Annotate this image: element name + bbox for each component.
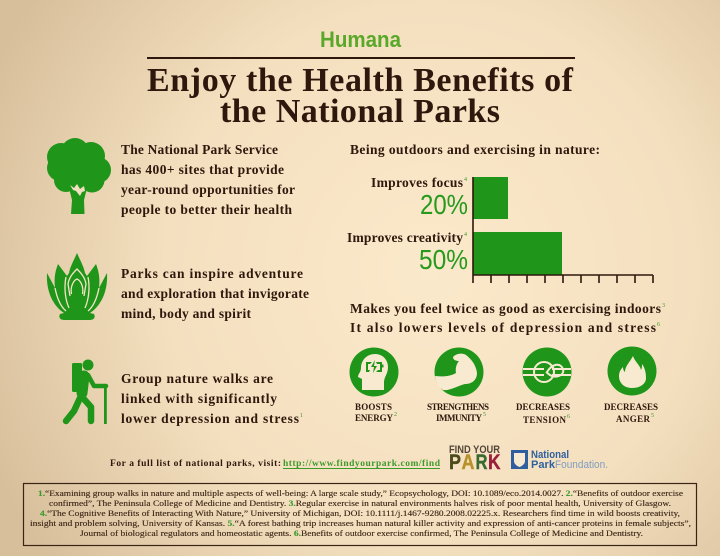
label: improves creativity: 4	[464, 232, 467, 238]
title: Enjoy the Health Benefits of	[147, 62, 574, 99]
panel: references: confirmed”, The Peninsula College of Medicine and Dentistry. 3.Regular exercise in natural environments halves risk of poor mental health, University of Glasgow.	[49, 499, 671, 508]
label: boosts energy: ENERGY	[355, 413, 394, 423]
label: decreases tension: TENSION	[523, 415, 566, 425]
logo: find your park: A	[462, 451, 474, 474]
logo: national park foundation: Foundation.	[555, 459, 608, 471]
text: park service	[121, 142, 295, 217]
label: decreases tension: DECREASES	[516, 402, 570, 412]
label: decreases anger	[604, 402, 658, 424]
text: group walks: 1	[300, 413, 303, 419]
logo: find your park: R	[476, 451, 488, 474]
text: group walks: Group nature walks are	[121, 371, 273, 386]
label: strengthens immunity: 5	[483, 412, 486, 418]
panel: references: 1.“Examining group walks in nature and multiple aspects of well-being: A large scale study,” Ecopsychology, DOI: 10.1089/eco.2014.0027. 2.“Benefits of outdoor exercise	[38, 489, 683, 498]
label: boosts energy	[355, 402, 397, 423]
text: park service: The National Park Service	[121, 142, 278, 157]
icon: tree	[47, 138, 111, 214]
icon: boosts energy	[350, 348, 398, 396]
text: full list link	[110, 459, 441, 469]
label: improves focus	[371, 175, 468, 220]
logo: national park foundation: Park	[531, 459, 556, 471]
icon: hiker	[66, 360, 107, 424]
header rule	[147, 57, 575, 59]
icon: strengthens immunity	[434, 348, 484, 396]
label: decreases tension	[516, 402, 570, 425]
label: improves focus: 4	[464, 177, 467, 183]
text: twice as good: Makes you feel twice as good as exercising indoors	[350, 301, 661, 316]
bar: creativity 50%	[473, 232, 562, 275]
text: inspire	[121, 266, 309, 321]
bar: focus 20%	[473, 177, 508, 219]
panel: references: insight and problem solving, University of Kansas. 5.“A forest bathing trip increases human natural killer activity and expression of anti-cancer proteins in female subjects”,	[30, 519, 691, 528]
text: twice as good: 6	[657, 322, 660, 328]
label: improves focus: Improves focus	[371, 175, 463, 190]
label: strengthens immunity: IMMUNITY	[436, 413, 482, 423]
title: the National Parks	[220, 93, 500, 130]
text: group walks: lower depression and stress	[121, 411, 299, 426]
icon: decreases anger	[608, 346, 656, 396]
text: park service: year-round opportunities for	[121, 182, 295, 197]
chart axes	[473, 177, 653, 283]
icon: decreases tension	[522, 348, 572, 396]
text: inspire: mind, body and spirit	[121, 306, 252, 321]
text: full list link: http://www.findyourpark.com/find	[283, 459, 441, 469]
label: improves focus: 20%	[420, 189, 468, 220]
text: twice as good: 3	[662, 303, 665, 309]
label: improves creativity	[347, 230, 468, 275]
logo: national park foundation: National	[531, 449, 569, 461]
label: boosts energy: 2	[394, 412, 397, 418]
text: twice as good	[350, 301, 665, 335]
panel: references: Journal of biological regulators and homeostatic agents. 6.Benefits of outdoor exercise confirmed, The Peninsula College of Medicine and Dentistry.	[80, 529, 643, 538]
text: park service: has 400+ sites that provide	[121, 162, 284, 177]
label: decreases tension: 6	[567, 414, 570, 420]
bar chart	[347, 175, 653, 283]
panel: references	[24, 484, 696, 546]
text: park service: people to better their health	[121, 202, 292, 217]
text: inspire: and exploration that invigorate	[121, 286, 309, 301]
text: group walks: linked with significantly	[121, 391, 277, 406]
label: strengthens immunity: STRENGTHENS	[427, 402, 489, 412]
label: decreases anger: 5	[651, 413, 654, 419]
text: full list link: For a full list of national parks, visit:	[110, 459, 281, 469]
label: decreases anger: ANGER	[616, 414, 650, 424]
title	[147, 62, 574, 130]
text: group walks	[121, 371, 303, 426]
panel: references: 4.“The Cognitive Benefits of Interacting With Nature,” University of Michigan, DOI: 10.1111/j.1467-9280.2008.02225.x. Researchers find time in wild boosts creativity,	[40, 509, 680, 518]
logo: find your park: FIND YOUR	[449, 444, 500, 456]
label: improves creativity: 50%	[419, 244, 468, 275]
label: improves creativity: Improves creativity	[347, 230, 463, 245]
text: inspire: Parks can inspire adventure	[121, 266, 303, 281]
label: boosts energy: BOOSTS	[355, 402, 392, 412]
icon: lotus meditation	[47, 253, 107, 320]
logo: national park foundation	[511, 449, 608, 471]
label: strengthens immunity	[427, 402, 489, 423]
logo: Humana: Humana	[320, 27, 402, 52]
label: decreases anger: DECREASES	[604, 402, 658, 412]
text: twice as good: It also lowers levels of depression and stress	[350, 320, 656, 335]
logo: find your park: K	[488, 451, 500, 474]
logo: find your park: P	[449, 451, 461, 474]
heading: being outdoors: Being outdoors and exercising in nature:	[350, 142, 600, 157]
logo: find your park	[449, 444, 500, 474]
